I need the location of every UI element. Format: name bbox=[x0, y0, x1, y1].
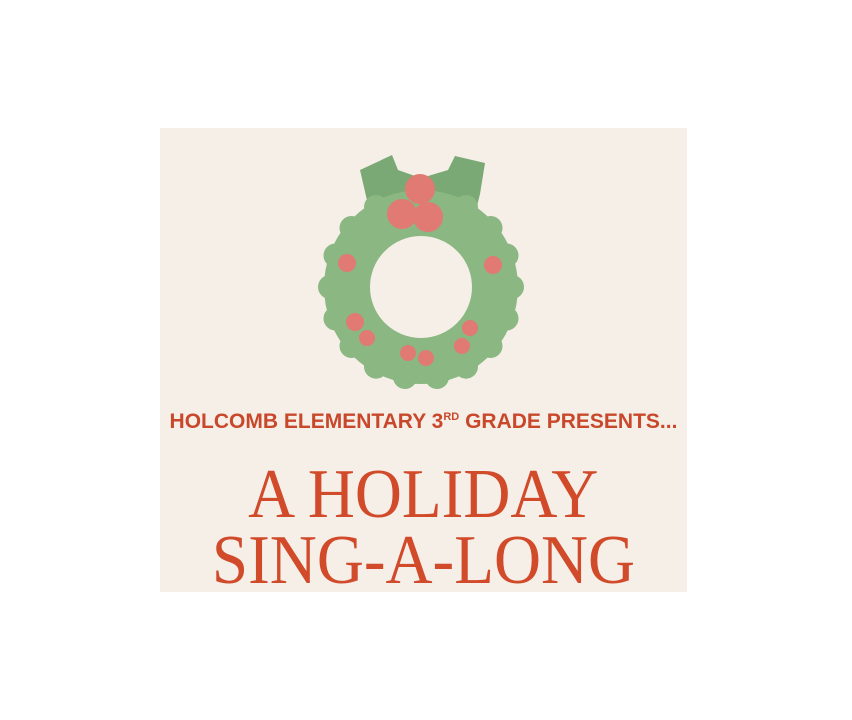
title line 1: A HOLIDAY bbox=[248, 456, 599, 533]
ring bbox=[318, 195, 524, 389]
panel: background bbox=[160, 128, 687, 592]
title line 2: SING-A-LONG bbox=[212, 522, 635, 599]
berries bbox=[338, 174, 502, 366]
subtitle: HOLCOMB ELEMENTARY 3RD GRADE PRESENTS... bbox=[170, 410, 677, 433]
holly leaves bbox=[360, 155, 485, 236]
